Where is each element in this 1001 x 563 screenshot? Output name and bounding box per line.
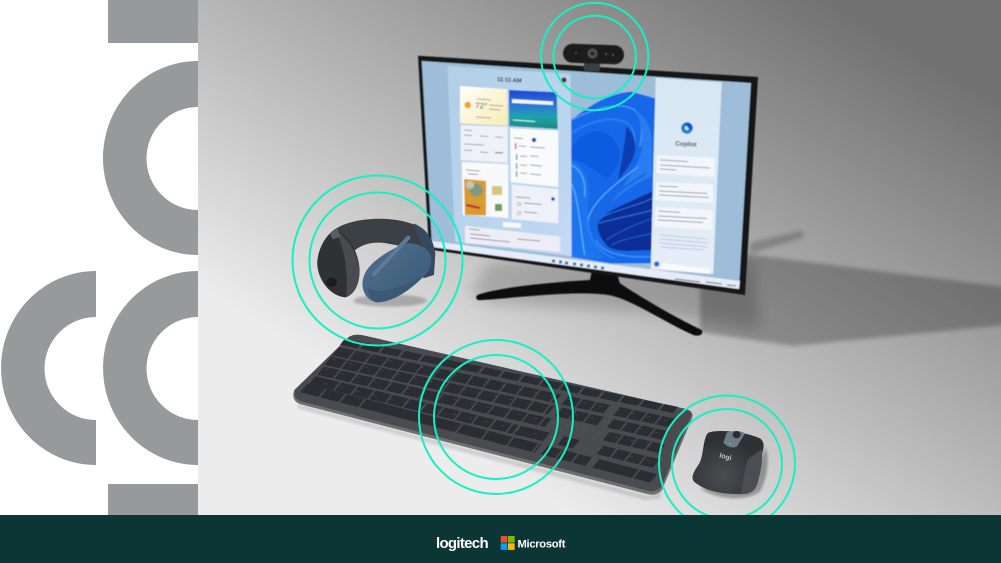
footer bar bbox=[0, 515, 1001, 563]
keyboard rings bbox=[419, 340, 573, 494]
keyboard bbox=[293, 335, 693, 500]
teal rings bbox=[292, 3, 795, 532]
time: 11:11 AM bbox=[497, 77, 522, 85]
key legends bbox=[324, 350, 672, 462]
feed card bbox=[465, 226, 560, 252]
space key row bbox=[304, 388, 653, 478]
monitor stand bbox=[476, 272, 702, 336]
right ear cup bbox=[362, 243, 431, 302]
keyboard top edge bbox=[353, 336, 686, 410]
profile avatar bbox=[561, 77, 567, 83]
headset shadow bbox=[353, 295, 427, 307]
home key row bbox=[321, 371, 663, 449]
stocks widget bbox=[461, 125, 508, 163]
tasks widget bbox=[512, 184, 558, 223]
copilot input bbox=[661, 263, 710, 274]
photo background gradient bbox=[198, 0, 1001, 515]
shift key row bbox=[312, 380, 657, 464]
keyboard shadow bbox=[297, 404, 662, 500]
widgets panel bbox=[447, 66, 572, 256]
see more button bbox=[503, 222, 521, 228]
microphone boom bbox=[374, 238, 408, 274]
scroll area bbox=[723, 431, 745, 448]
weather widget: 72° bbox=[475, 101, 488, 111]
copilot suggestion cards bbox=[655, 155, 715, 250]
calendar widget bbox=[510, 128, 558, 187]
monitor shadow on desk bbox=[470, 231, 1001, 346]
microsoft wordmark: Microsoft bbox=[518, 538, 566, 550]
mouse rings bbox=[658, 394, 796, 515]
copilot label: Copilot bbox=[675, 140, 697, 149]
mouse shadow bbox=[700, 447, 768, 498]
keyboard deck bbox=[294, 335, 692, 491]
copilot side panel bbox=[651, 78, 722, 274]
monitor bezel bbox=[418, 56, 758, 295]
keyboard lower edge bbox=[293, 335, 693, 495]
mouse bbox=[693, 431, 768, 498]
headband bbox=[330, 219, 431, 257]
headset rings bbox=[292, 176, 462, 346]
photos widget bbox=[462, 162, 508, 218]
number key row bbox=[336, 351, 672, 423]
monitor bbox=[418, 43, 758, 336]
decorative grey letter shapes bbox=[1, 0, 198, 515]
taskbar bbox=[432, 241, 740, 289]
microsoft logo squares bbox=[501, 536, 515, 550]
mouse side panel bbox=[740, 449, 762, 494]
logitech logo: logitech bbox=[436, 535, 488, 552]
QWERTY key row bbox=[328, 361, 666, 436]
function key row bbox=[343, 342, 675, 410]
mouse body bbox=[693, 431, 764, 494]
left ear cup bbox=[317, 229, 360, 297]
webcam rings bbox=[541, 3, 648, 110]
white left panel bbox=[0, 0, 198, 515]
desktop wallpaper swirl bbox=[571, 92, 655, 263]
mouse logo: logi bbox=[719, 452, 732, 462]
news widget bbox=[509, 90, 558, 129]
screen desktop background bbox=[422, 61, 751, 289]
headset bbox=[317, 219, 435, 307]
webcam bbox=[563, 43, 624, 71]
weather widget bbox=[460, 86, 507, 126]
copilot icon bbox=[681, 122, 693, 134]
